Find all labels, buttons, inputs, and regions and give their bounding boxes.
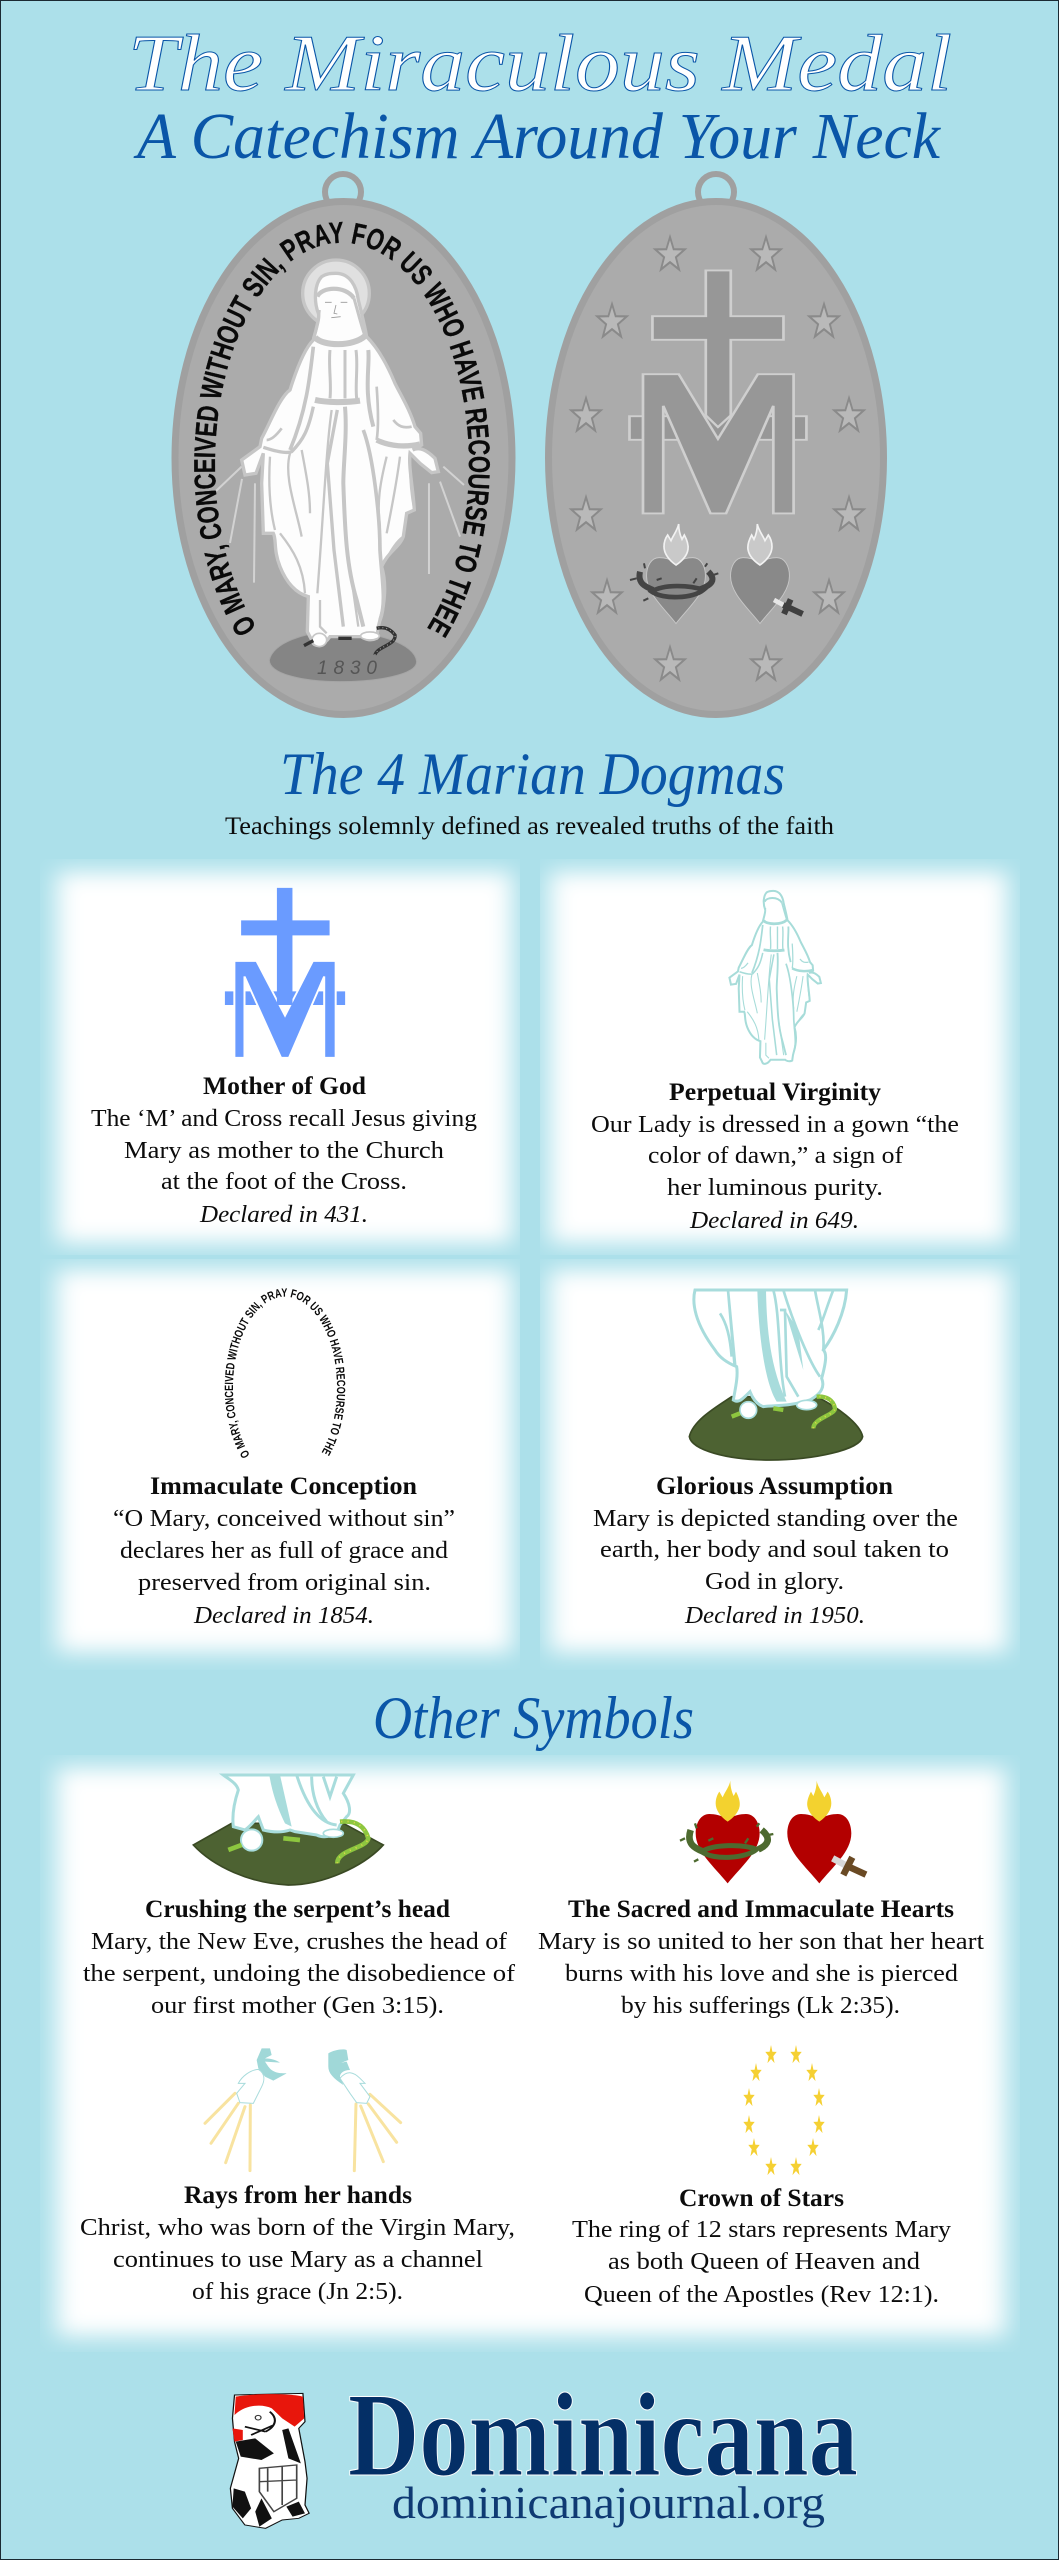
- sacred hearts: [630, 524, 803, 623]
- text: crushing the serpent's head: Mary, the New Eve, crushes the head of: [91, 1928, 508, 1955]
- text: Perpetual Virginity: color of dawn,” a sign of: [648, 1142, 904, 1169]
- icon: crushing the serpent: [193, 1775, 383, 1885]
- icon: prayer arc: O MARY, CONCEIVED WITHOUT SIN, PRAY FOR US WHO HAVE RECOURSE TO THEE: [224, 1288, 346, 1458]
- text: sacred and immaculate hearts: burns with his love and she is pierced: [565, 1960, 958, 1987]
- text: crushing the serpent's head: the serpent, undoing the disobedience of: [83, 1960, 516, 1987]
- panel: Glorious Assumption: [550, 1270, 1007, 1652]
- text: Mother of God: The ‘M’ and Cross recall Jesus giving: [91, 1105, 477, 1132]
- title: The Miraculous Medal: [128, 20, 952, 108]
- text: sacred and immaculate hearts: [538, 1896, 984, 2019]
- text: crushing the serpent's head: our first mother (Gen 3:15).: [151, 1992, 444, 2019]
- medal: reverse with cross, M and hearts: [548, 174, 884, 714]
- panel: Immaculate Conception: [42, 1259, 520, 1665]
- text: Glorious Assumption: [593, 1473, 958, 1629]
- panel: other symbols: [57, 1768, 1005, 2336]
- text: Perpetual Virginity: Perpetual Virginity: [669, 1079, 882, 1106]
- section heading: dogmas: The 4 Marian Dogmas: [280, 741, 785, 807]
- text: Perpetual Virginity: [591, 1079, 959, 1234]
- text: Immaculate Conception: “O Mary, conceived without sin”: [113, 1505, 455, 1532]
- text: Immaculate Conception: [113, 1473, 455, 1629]
- icon: cross and M: [225, 888, 345, 1057]
- section subheading: Teachings solemnly defined as revealed truths of the faith: [225, 813, 835, 840]
- text: Glorious Assumption: God in glory.: [705, 1568, 844, 1595]
- text: Glorious Assumption: Mary is depicted standing over the: [593, 1505, 958, 1532]
- text: rays from her hands: continues to use Mary as a channel: [113, 2246, 483, 2273]
- text: Immaculate Conception: Immaculate Conception: [150, 1473, 417, 1500]
- text: Mother of God: Mother of God: [203, 1073, 366, 1100]
- text: sacred and immaculate hearts: Mary is so united to her son that her heart: [538, 1928, 984, 1955]
- text: Mother of God: [91, 1073, 477, 1228]
- text: Immaculate Conception: declares her as full of grace and: [120, 1537, 448, 1564]
- text: rays from her hands: Rays from her hands: [184, 2182, 412, 2209]
- icon: crown of twelve stars: [743, 2045, 825, 2175]
- panel: Mother of God: [57, 872, 512, 1243]
- text: Immaculate Conception: preserved from original sin.: [138, 1569, 431, 1596]
- text: crown of stars: [572, 2185, 952, 2308]
- subtitle: A Catechism Around Your Neck: [133, 100, 942, 173]
- figure of Mary with rays and globe: [216, 260, 464, 682]
- text: Mother of God: Declared in 431.: [199, 1201, 368, 1228]
- text: crushing the serpent's head: Crushing the serpent’s head: [145, 1896, 450, 1923]
- text: crown of stars: Crown of Stars: [679, 2185, 844, 2212]
- text: Glorious Assumption: Declared in 1950.: [684, 1602, 865, 1629]
- logo: heraldic dog crest: [230, 2393, 309, 2528]
- icon: sacred and immaculate hearts: [680, 1781, 866, 1883]
- website url: dominicanajournal.org: [392, 2477, 825, 2528]
- text: Glorious Assumption: Glorious Assumption: [656, 1473, 893, 1500]
- icon: prayer arc: [224, 1288, 346, 1458]
- text: Mother of God: at the foot of the Cross.: [161, 1168, 407, 1195]
- text: crown of stars: The ring of 12 stars represents Mary: [572, 2216, 952, 2243]
- text: sacred and immaculate hearts: by his sufferings (Lk 2:35).: [621, 1992, 900, 2019]
- text: Perpetual Virginity: her luminous purity.: [667, 1174, 883, 1201]
- text: Immaculate Conception: Declared in 1854.: [193, 1602, 374, 1629]
- text: crushing the serpent's head: [83, 1896, 516, 2019]
- medal: front with Mary: [172, 171, 516, 718]
- year 1830: 1830: [317, 658, 377, 679]
- text: Perpetual Virginity: Our Lady is dressed in a gown “the: [591, 1111, 959, 1138]
- section heading: other symbols: Other Symbols: [373, 1685, 694, 1751]
- text: rays from her hands: Christ, who was born of the Virgin Mary,: [80, 2214, 515, 2241]
- ring of stars: [571, 237, 864, 680]
- text: rays from her hands: of his grace (Jn 2:5).: [192, 2278, 403, 2305]
- icon: feet on the globe: [689, 1290, 863, 1460]
- icon: hands with rays: [205, 2048, 401, 2171]
- text: rays from her hands: [80, 2182, 515, 2305]
- text: Glorious Assumption: earth, her body and soul taken to: [600, 1536, 949, 1563]
- text: Perpetual Virginity: Declared in 649.: [689, 1207, 859, 1234]
- panel: Perpetual Virginity: [550, 872, 1007, 1243]
- logo wordmark: Dominicana: [348, 2368, 858, 2501]
- cross and M monogram: [629, 270, 806, 513]
- text: Mother of God: Mary as mother to the Church: [124, 1137, 444, 1164]
- text: sacred and immaculate hearts: The Sacred and Immaculate Hearts: [568, 1896, 954, 1923]
- text: crown of stars: as both Queen of Heaven and: [608, 2248, 920, 2275]
- icon: Mary outline: [729, 891, 821, 1064]
- prayer text around the medal: O MARY, CONCEIVED WITHOUT SIN, PRAY FOR US WHO HAVE RECOURSE TO THEE: [194, 222, 490, 638]
- text: crown of stars: Queen of the Apostles (Rev 12:1).: [584, 2281, 939, 2308]
